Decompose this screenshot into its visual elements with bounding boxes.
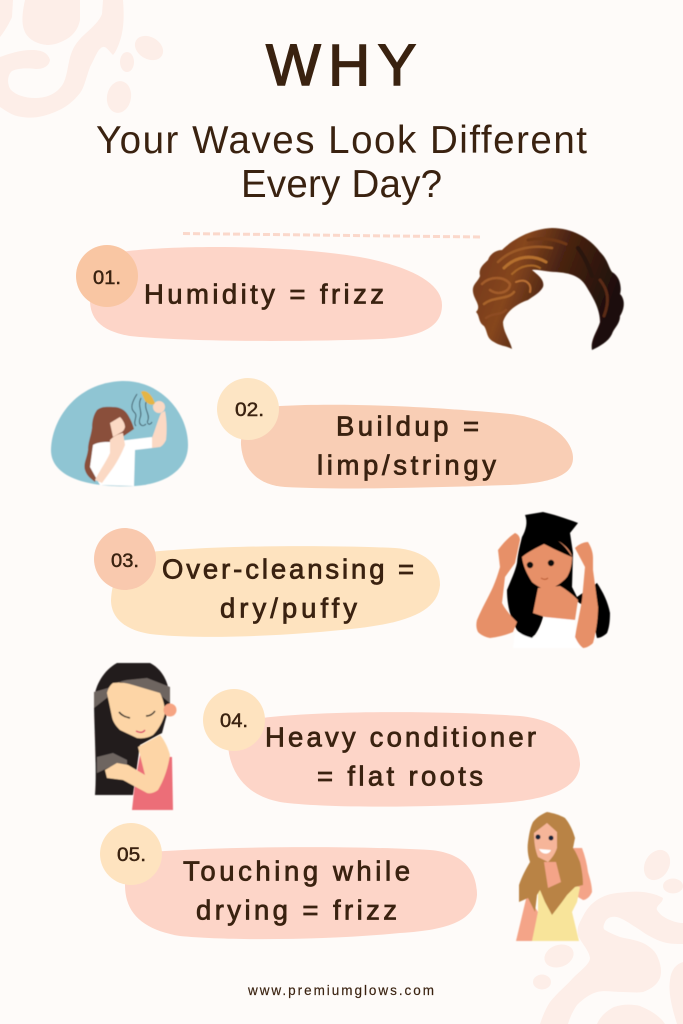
blob 02 — [241, 405, 573, 488]
left arm — [516, 895, 538, 941]
decoration: top-left swirl — [0, 0, 167, 118]
label 02 — [317, 410, 496, 480]
left arm — [476, 533, 520, 638]
number 05: 05. — [117, 844, 146, 866]
chest gap — [544, 862, 561, 888]
label 02: Buildup = — [336, 410, 479, 442]
item 03: over-cleansing — [94, 528, 440, 637]
eyes and smile — [527, 560, 554, 580]
label 01: Humidity = frizz — [144, 278, 384, 310]
item 04: heavy conditioner — [203, 689, 580, 807]
label 03: Over-cleansing = — [162, 554, 414, 584]
label 05 — [183, 856, 410, 926]
icon: woman inspecting hair on brush — [51, 381, 188, 486]
pink dress — [132, 755, 173, 810]
white top — [513, 617, 583, 648]
arm and shoulder — [105, 735, 170, 793]
raised arm — [573, 848, 592, 900]
ear — [164, 704, 176, 716]
face — [107, 683, 165, 738]
subtitle — [96, 119, 587, 206]
loose hair strands — [132, 394, 152, 426]
eyes and smile — [536, 834, 554, 854]
footer: website: www.premiumglows.com — [247, 983, 434, 998]
right arm — [575, 542, 598, 648]
item 01: humidity — [76, 245, 442, 341]
golden hair — [519, 812, 583, 915]
face — [110, 417, 125, 437]
icon: woman with wavy golden hair — [516, 812, 592, 941]
icon: woman with long dark hair — [94, 663, 176, 810]
blob 03 — [111, 546, 440, 637]
subtitle: Every Day? — [241, 163, 442, 206]
number 01: 01. — [93, 267, 121, 289]
front arm — [95, 433, 125, 483]
face — [534, 823, 557, 862]
label 03: dry/puffy — [220, 592, 357, 624]
label 04 — [265, 722, 536, 792]
label 05: Touching while — [183, 856, 410, 886]
item 02: buildup — [217, 378, 573, 488]
label 03 — [162, 554, 414, 624]
brush — [141, 391, 155, 405]
title: WHY: WHY — [266, 33, 424, 98]
white top — [90, 437, 152, 486]
blob 05 — [125, 847, 477, 939]
label 05: drying = frizz — [196, 894, 397, 926]
number 02: 02. — [235, 399, 264, 421]
hair fringe — [522, 538, 572, 557]
subtitle: Your Waves Look Different — [96, 119, 587, 162]
hand on brush — [153, 401, 165, 413]
blob 01 — [90, 247, 442, 341]
badge 03 — [94, 528, 156, 590]
dark hair — [94, 663, 170, 795]
badge 01 — [76, 245, 138, 307]
number 04: 04. — [220, 710, 248, 732]
number 03: 03. — [111, 550, 139, 572]
label 02: limp/stringy — [317, 450, 496, 480]
neck and chest — [533, 586, 578, 620]
raised arm — [152, 411, 167, 448]
yellow dress — [532, 883, 580, 941]
blob 04 — [228, 712, 580, 807]
icon: woman with puffy black hair — [476, 512, 610, 648]
decoration: bottom-right swirl — [533, 845, 683, 1024]
black hair — [507, 512, 610, 638]
label 04: Heavy conditioner — [265, 722, 536, 752]
badge 04 — [203, 689, 265, 751]
item 05: touching while drying — [100, 823, 477, 939]
icon: curly brown hair wig — [473, 228, 624, 350]
blue oval backdrop — [51, 381, 188, 486]
label 04: = flat roots — [317, 760, 483, 792]
mouth — [136, 730, 145, 732]
closed eyes — [119, 711, 155, 718]
long brown hair — [84, 407, 134, 482]
face — [522, 539, 572, 590]
shine bands — [94, 678, 170, 773]
neck and chest — [540, 855, 565, 890]
badge 05 — [100, 823, 162, 885]
badge 02 — [217, 378, 279, 440]
